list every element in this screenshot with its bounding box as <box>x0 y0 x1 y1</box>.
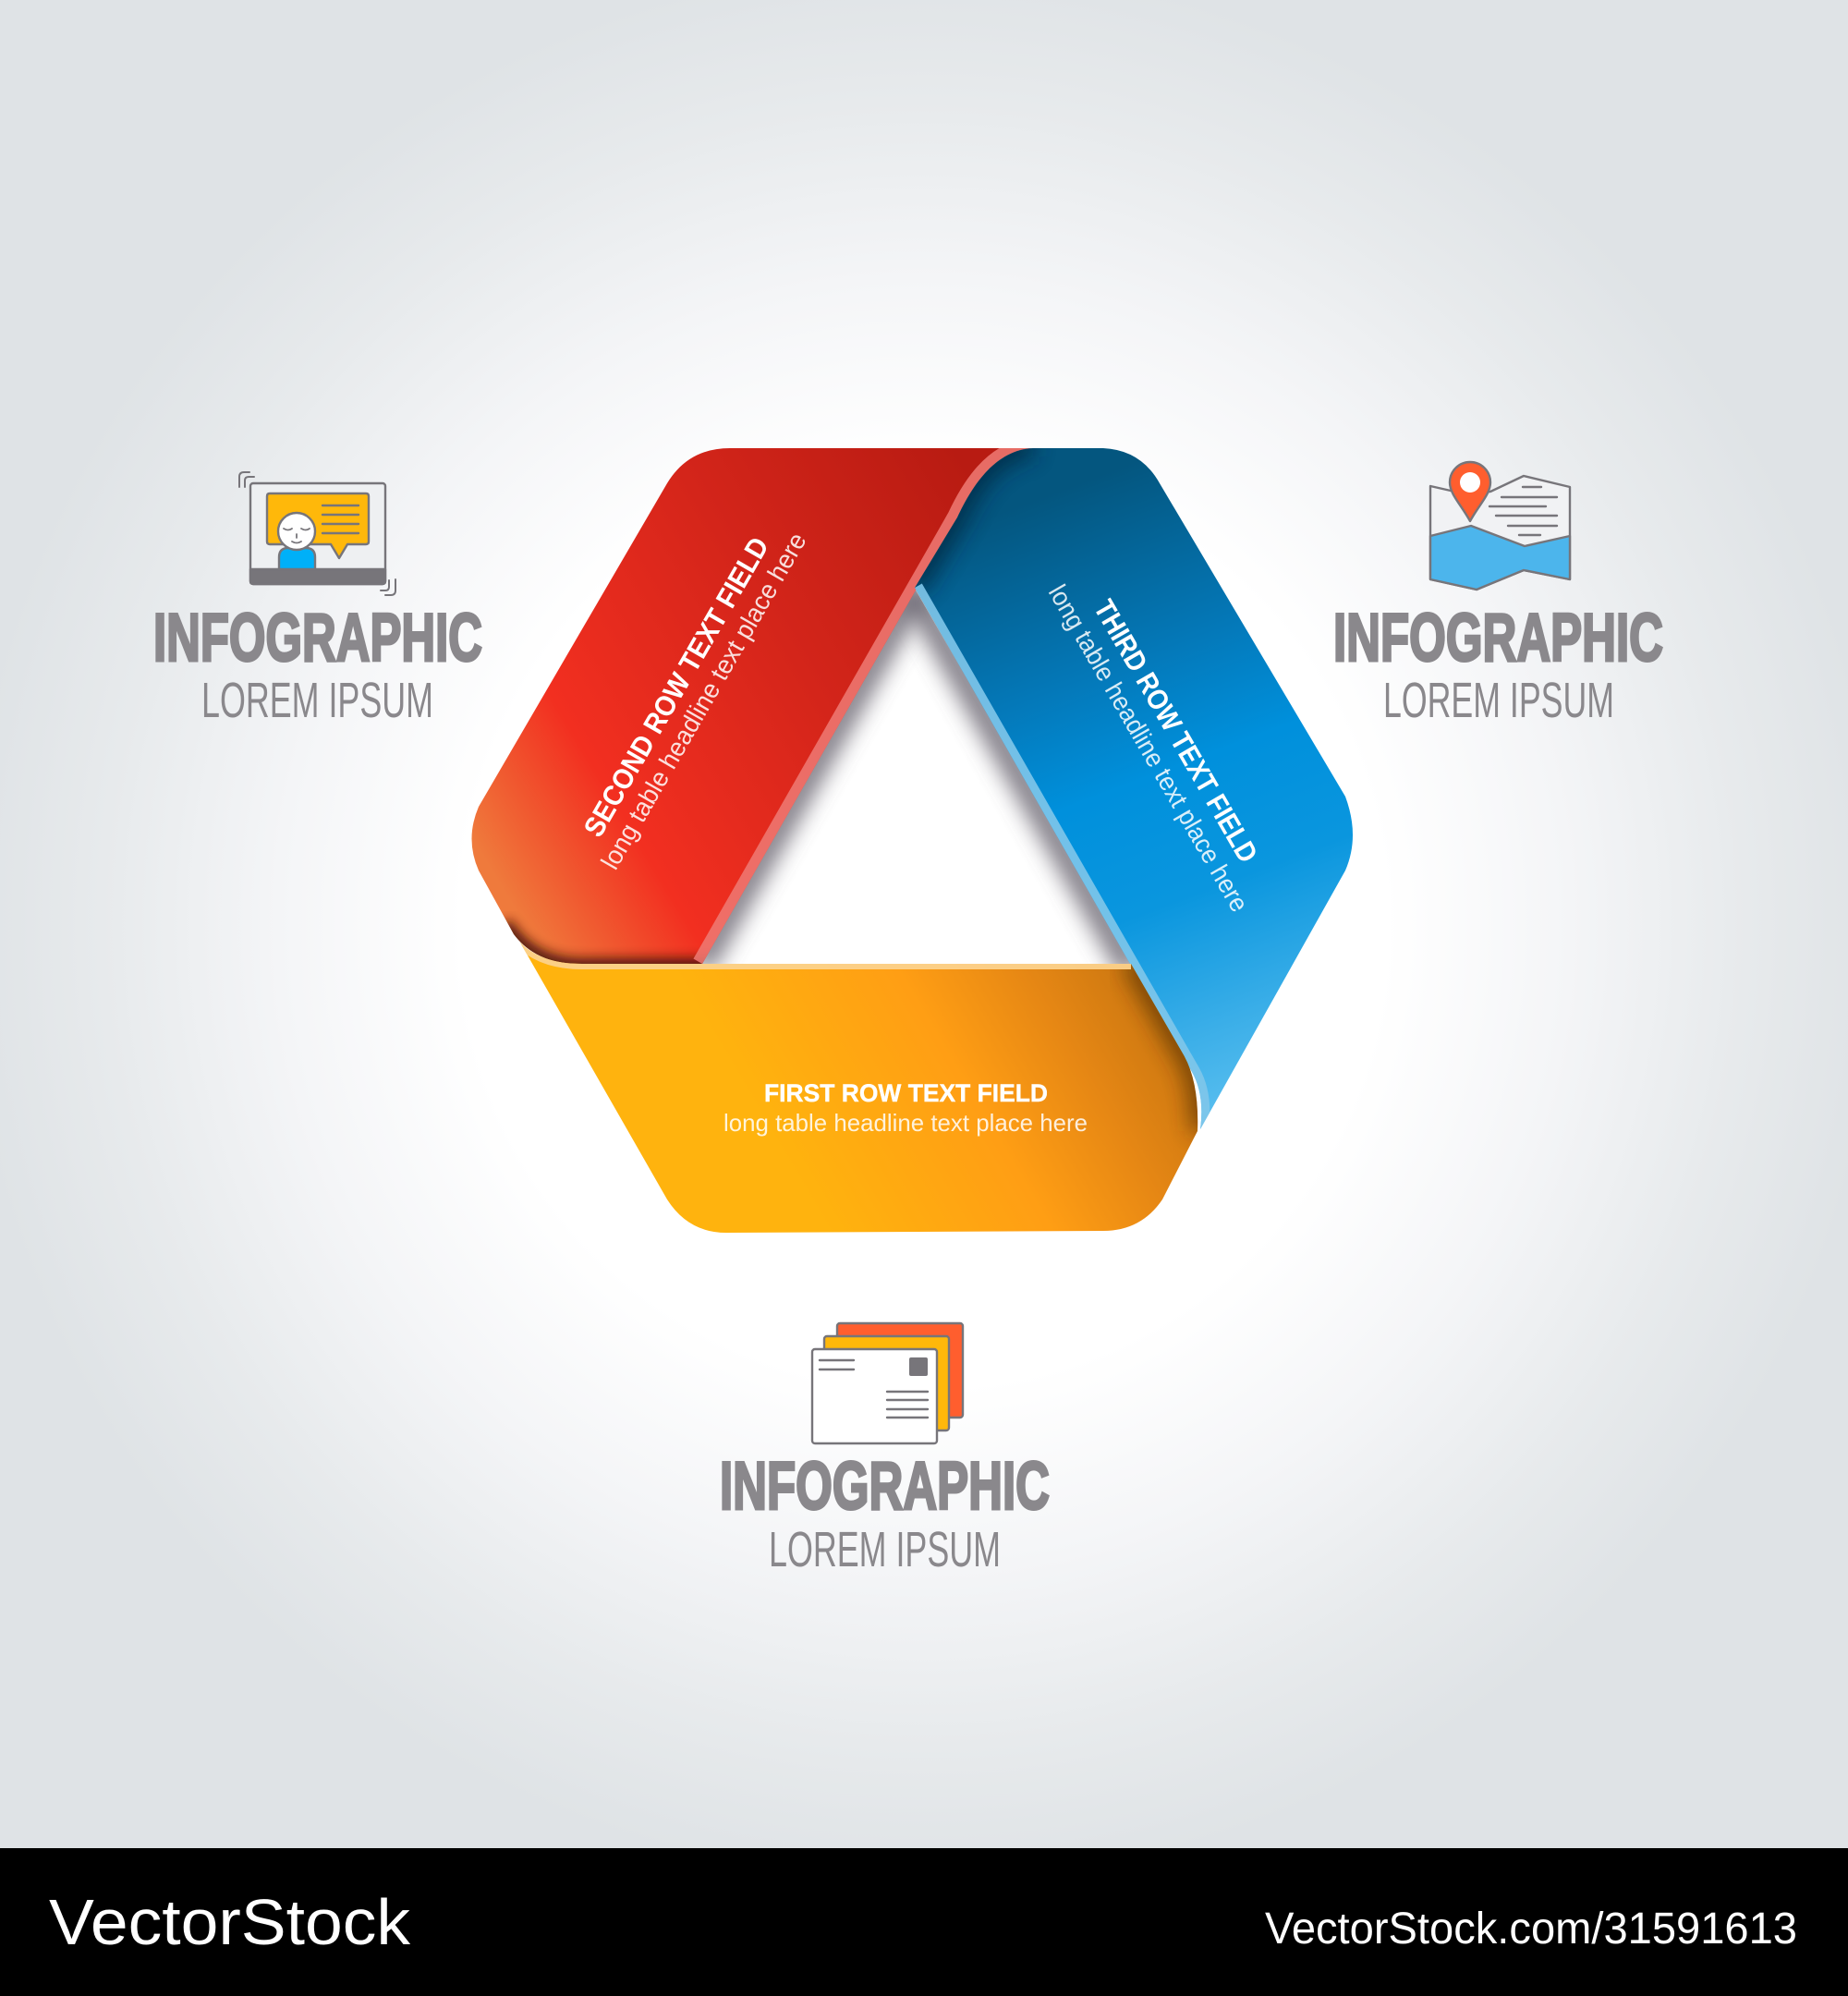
bottom heading: INFOGRAPHIC <box>720 1449 1050 1524</box>
second row subtitle: long table headline text place here <box>595 528 812 874</box>
second row title: SECOND ROW TEXT FIELD <box>578 531 775 843</box>
third row subtitle: long table headline text place here <box>1043 580 1254 917</box>
right subheading: LOREM IPSUM <box>1383 673 1614 728</box>
icon: stacked postcards <box>812 1323 963 1443</box>
left subheading: LOREM IPSUM <box>201 673 433 728</box>
first row title: FIRST ROW TEXT FIELD <box>764 1079 1048 1107</box>
watermark logo text: VectorStock <box>49 1886 411 1958</box>
first row subtitle: long table headline text place here <box>723 1109 1088 1137</box>
triangle inner shadow <box>691 588 1133 970</box>
third row title: THIRD ROW TEXT FIELD <box>1088 594 1264 868</box>
watermark url: VectorStock.com/31591613 <box>1265 1905 1797 1953</box>
icon: map with location pin <box>1430 462 1570 590</box>
panel: second row red ribbon <box>471 448 1033 967</box>
panel: third row blue ribbon <box>913 445 1353 1129</box>
icon: presentation screen with speaker <box>239 472 395 595</box>
watermark bar <box>0 1848 1848 1996</box>
panel: first row orange ribbon <box>517 940 1201 1233</box>
bottom subheading: LOREM IPSUM <box>769 1522 1001 1577</box>
left heading: INFOGRAPHIC <box>153 601 482 675</box>
right heading: INFOGRAPHIC <box>1333 601 1663 675</box>
